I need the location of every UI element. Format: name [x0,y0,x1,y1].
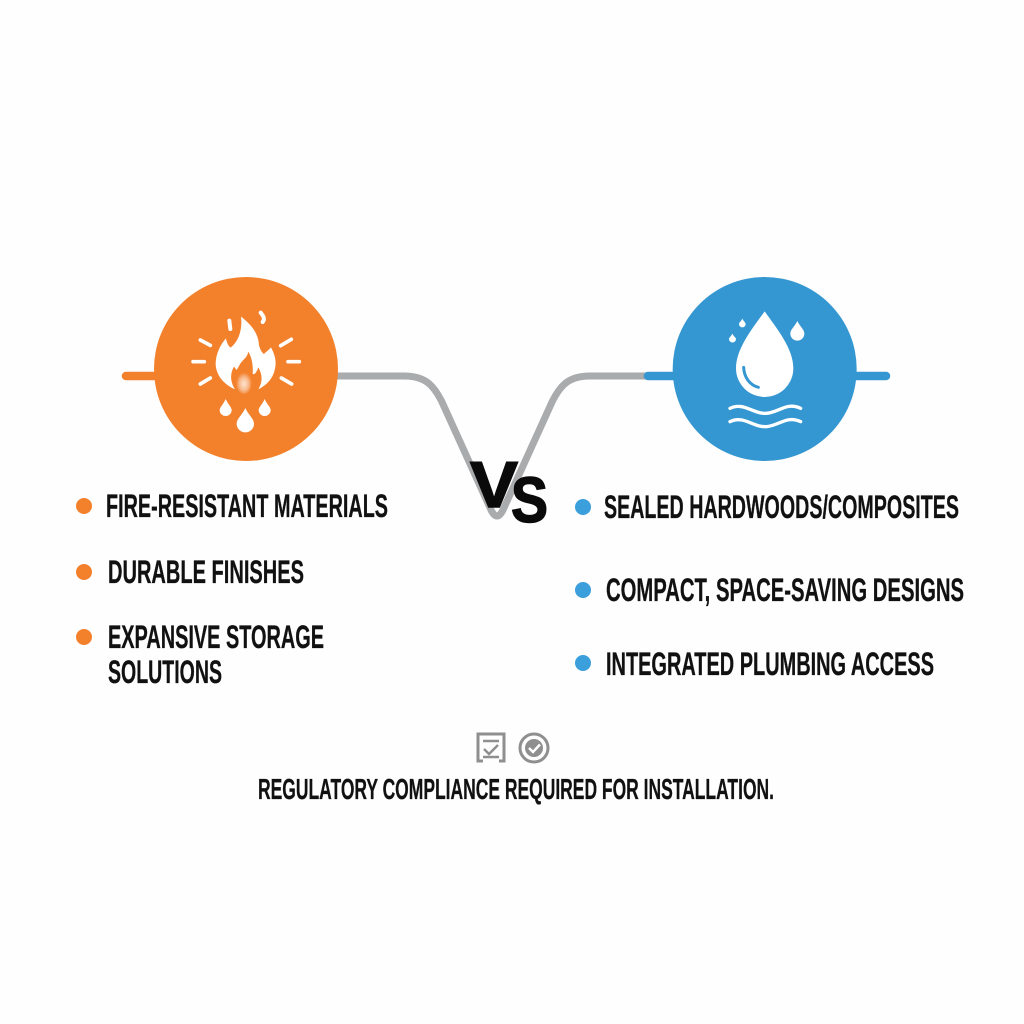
connector: grey V line [336,376,650,516]
VS label: V [470,448,518,521]
icon: fire circle [154,277,338,461]
bullet [575,655,591,671]
small drops [729,319,804,342]
bullet [76,564,92,580]
drop highlight [744,367,758,387]
bullet [575,582,591,598]
icon: water circle [673,277,857,461]
icon: compliance check badge [520,734,548,762]
VS label: S [511,464,548,536]
right list: water features [575,489,964,682]
flame shape [216,317,276,389]
large water drop [736,311,793,397]
left list: fire features [76,488,388,690]
bullet [76,498,92,514]
bullet [575,499,591,515]
connector: blue stubs [648,372,886,380]
bullet [76,629,92,645]
item: FIRE-RESISTANT MATERIALS [106,488,388,524]
item: EXPANSIVE STORAGE [108,619,324,655]
connector: orange stub [126,372,160,380]
item: SOLUTIONS [108,654,222,690]
VS label [470,448,548,536]
water waves [730,406,801,427]
drops under flame [220,399,271,432]
flame sparks [229,313,264,329]
item [108,619,324,690]
flame core glow [236,371,252,394]
icon: compliance document [478,734,504,761]
flame rays [193,339,299,384]
item: DURABLE FINISHES [108,554,304,590]
